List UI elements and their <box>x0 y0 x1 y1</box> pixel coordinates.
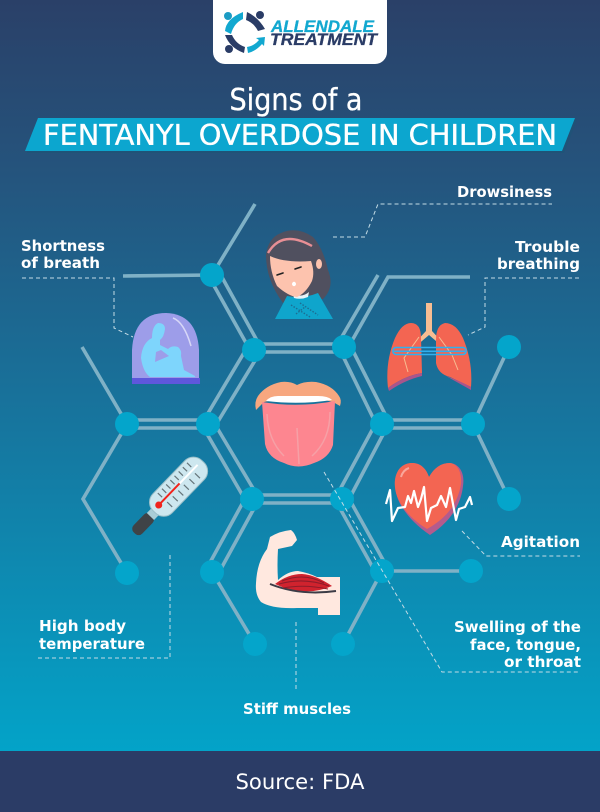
icon: lungs <box>387 303 471 391</box>
footer <box>0 751 600 812</box>
label: swelling: or throat <box>504 653 582 671</box>
label: shortness of breath: Shortness <box>21 237 105 255</box>
label: drowsiness: Drowsiness <box>457 183 552 201</box>
label: high body temperature: High body <box>39 617 126 635</box>
hexagon network <box>82 204 521 656</box>
icon: tongue and lips <box>255 382 341 466</box>
title banner: FENTANYL OVERDOSE IN CHILDREN <box>43 119 557 152</box>
icon: flexed arm <box>256 530 340 615</box>
logo text: TREATMENT <box>270 31 379 49</box>
icon: heart with ECG <box>386 463 472 535</box>
icon: thermometer <box>124 452 213 542</box>
logo icon <box>224 11 265 53</box>
title: signs of a: Signs of a <box>230 83 362 118</box>
label: agitation: Agitation <box>501 533 580 551</box>
label: high body temperature: temperature <box>39 635 145 653</box>
label: trouble breathing: breathing <box>497 255 580 273</box>
icon: drowsy girl <box>266 230 333 319</box>
label: stiff muscles: Stiff muscles <box>243 700 351 718</box>
leader lines <box>22 204 580 692</box>
logo text: ALLENDALE <box>270 18 375 36</box>
label: swelling: face, tongue, <box>470 636 581 654</box>
label: trouble breathing: Trouble <box>515 238 580 256</box>
logo card <box>213 0 387 64</box>
label: shortness of breath <box>21 237 105 272</box>
label: high body temperature <box>39 617 145 653</box>
footer: Source: FDA <box>236 770 365 794</box>
label: trouble breathing <box>497 238 580 273</box>
logo text <box>270 18 379 49</box>
icon: person in bell jar <box>132 313 200 384</box>
label: swelling: Swelling of the <box>454 618 581 636</box>
label: swelling <box>454 618 582 671</box>
label: shortness of breath: of breath <box>21 254 100 272</box>
